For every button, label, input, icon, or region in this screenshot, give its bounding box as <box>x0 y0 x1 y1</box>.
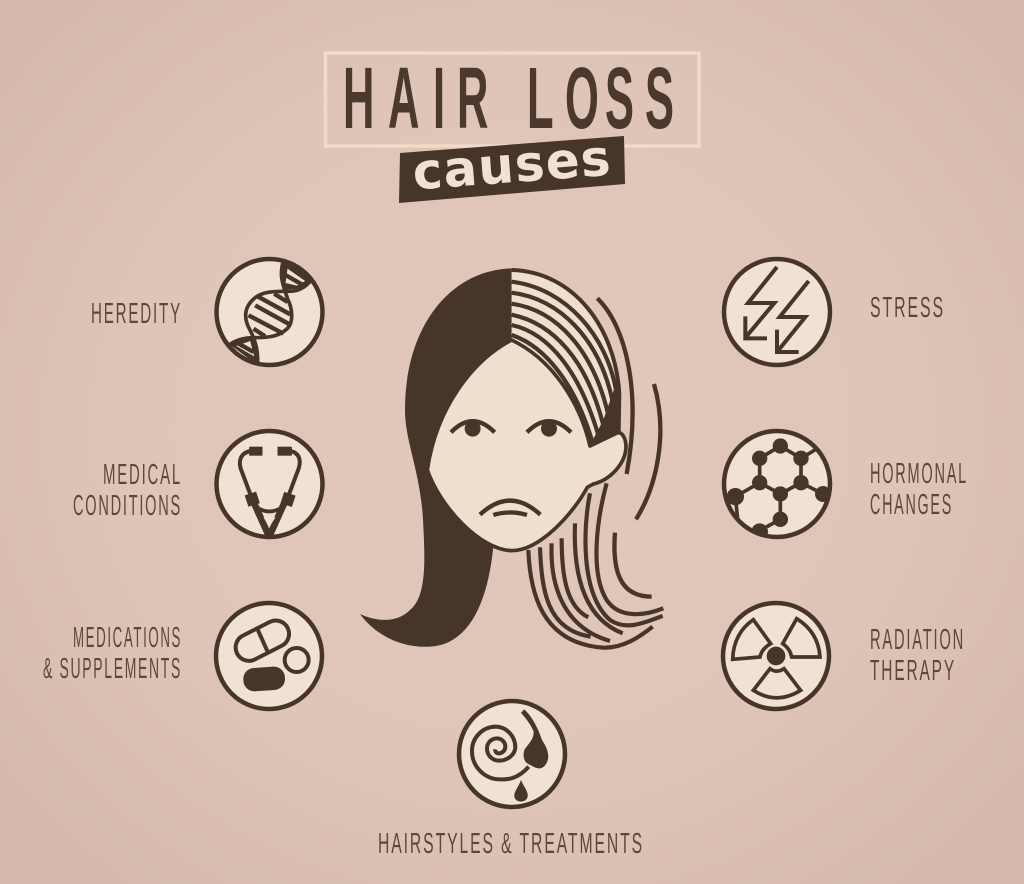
label: medical conditions <box>73 459 182 522</box>
label: medical conditions: MEDICAL <box>103 459 182 491</box>
subtitle text: causes <box>411 129 612 201</box>
label: radiation therapy <box>870 624 965 687</box>
title text: HAIR LOSS <box>343 50 674 147</box>
face <box>427 340 626 551</box>
falling hair strands <box>597 298 660 597</box>
icon: stethoscope <box>216 431 322 545</box>
label: heredity: HEREDITY <box>91 298 182 330</box>
title: hair loss causes <box>326 50 699 203</box>
subtitle banner <box>399 136 625 203</box>
title frame <box>326 53 699 146</box>
label: stress: STRESS <box>870 292 945 324</box>
label: medical conditions: CONDITIONS <box>73 490 182 522</box>
sad mouth <box>480 501 540 515</box>
infographic canvas: & SUPPLEMENTS <box>43 653 182 685</box>
eyes <box>451 421 571 437</box>
icon: stress lightning arrows <box>724 259 830 365</box>
dark hair left side <box>360 268 512 647</box>
icon: hormone molecule <box>724 431 831 540</box>
icon: hair follicle and curl <box>459 701 565 807</box>
right hair with strands <box>512 268 621 447</box>
central illustration: woman with thinning hair <box>360 268 663 648</box>
icon: radiation <box>723 603 829 709</box>
label: medications and supplements <box>43 622 182 685</box>
label: hormonal changes <box>870 458 968 521</box>
lower hair strands <box>528 483 663 648</box>
icon: pills <box>216 603 322 709</box>
icon: heredity dna <box>216 259 322 367</box>
infographic canvas: MEDICATIONS <box>73 622 182 654</box>
label: hairstyles and treatments: HAIRSTYLES & TREATMENTS <box>378 828 644 860</box>
